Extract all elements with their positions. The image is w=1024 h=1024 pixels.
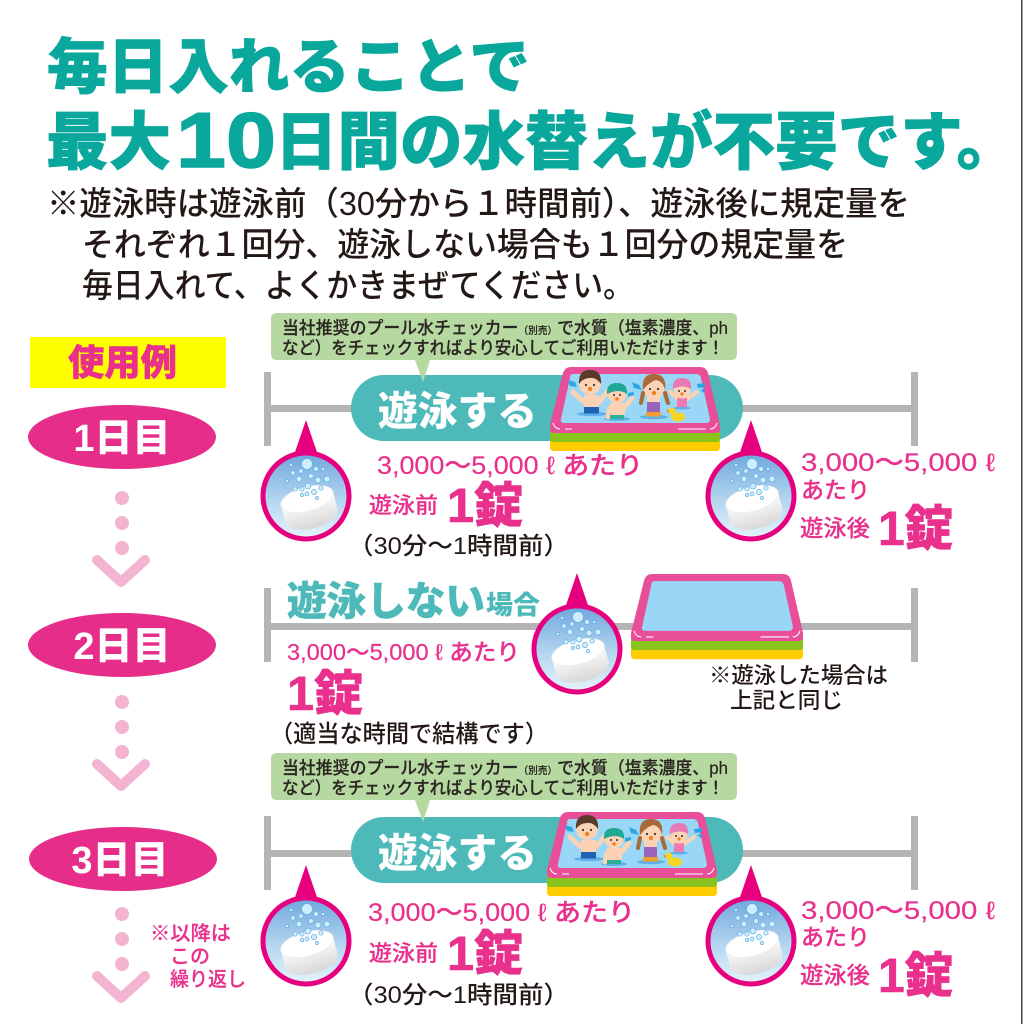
progress arrow 1 [97, 491, 145, 582]
day 3 dose after swim: 1錠 [878, 950, 953, 1003]
usage note: 毎日入れて、よくかきまぜてください。 [82, 267, 634, 304]
day 1 callout: など）をチェックすればより安心してご利用いただけます！ [282, 338, 724, 358]
day 1 callout [271, 313, 737, 382]
day 1 callout: 当社推奨のプール水チェッカー（別売）で水質（塩素濃度、ph [282, 318, 728, 338]
progress arrow 2 [97, 695, 145, 786]
title [46, 34, 1019, 184]
day 3 pool with children [547, 812, 717, 896]
day 2 dose [270, 639, 548, 748]
day 1 dose after swim [800, 449, 996, 556]
right edge rule [1021, 0, 1022, 1024]
day 2 dose: （適当な時間で結構です） [270, 721, 548, 748]
title: 毎日入れることで [47, 34, 530, 101]
day 1 dose before swim: 3,000～5,000 ℓ あたり [377, 452, 643, 480]
day 2 badge: 2日目 [73, 626, 171, 668]
day 3 dose after swim: 3,000～5,000 ℓ [801, 897, 996, 925]
day 2 empty pool [631, 574, 803, 659]
day 2 badge [28, 613, 216, 677]
usage note: ※遊泳時は遊泳前（30分から１時間前）、遊泳後に規定量を [47, 185, 910, 222]
day 3 timeline [264, 816, 918, 890]
day 3 badge: 3日目 [71, 840, 169, 882]
day 1 tablet after swim [708, 420, 794, 539]
day 2 heading: 遊泳しない [287, 580, 485, 624]
repeat note: 繰り返し [170, 968, 246, 991]
day 1 dose before swim: 遊泳前 [369, 493, 438, 518]
day 1 badge: 1日目 [73, 418, 171, 460]
title: 最大 [46, 108, 171, 178]
day 1 dose after swim: 3,000～5,000 ℓ [801, 449, 996, 477]
day 2 dose: 1錠 [287, 668, 363, 721]
day 3 tablet after swim [708, 865, 794, 984]
day 1 swim pill: 遊泳する [378, 390, 537, 434]
day 3 dose after swim: あたり [801, 924, 870, 950]
repeat note: ※以降は [150, 922, 231, 945]
repeat note [150, 922, 246, 991]
usage example label [30, 337, 226, 388]
day 3 dose before swim: 3,000～5,000 ℓ あたり [368, 899, 635, 927]
day 3 dose before swim: 遊泳前 [369, 941, 438, 966]
day 3 dose before swim: （30分～1時間前） [348, 982, 569, 1009]
day 3 callout [271, 753, 737, 822]
progress arrow 3 [97, 907, 145, 998]
day 1 dose before swim: （30分～1時間前） [348, 533, 569, 560]
day 1 dose before swim: 1錠 [447, 480, 523, 533]
title: 日間の水替えが不要です。 [275, 108, 1019, 178]
repeat note: この [170, 946, 210, 968]
day 2 note: ※遊泳した場合は [709, 663, 888, 688]
day 2 note: 上記と同じ [730, 688, 843, 713]
title: 10 [176, 96, 276, 184]
day 1 tablet before swim [263, 420, 349, 539]
day 3 swim pill: 遊泳する [378, 832, 537, 876]
day 1 badge [28, 405, 216, 469]
day 3 callout: など）をチェックすればより安心してご利用いただけます！ [282, 778, 724, 798]
day 3 tablet before swim [263, 865, 349, 984]
day 2 tablet [534, 573, 620, 692]
day 3 callout: 当社推奨のプール水チェッカー（別売）で水質（塩素濃度、ph [282, 758, 728, 778]
day 2 dose: 3,000～5,000 ℓ あたり [287, 639, 520, 665]
day 1 dose before swim [348, 452, 643, 560]
day 3 dose after swim: 遊泳後 [800, 962, 870, 988]
usage example label: 使用例 [68, 342, 177, 383]
day 1 dose after swim: あたり [801, 477, 870, 503]
day 1 dose after swim: 遊泳後 [800, 515, 870, 541]
usage note [47, 185, 910, 304]
day 1 timeline [264, 372, 918, 446]
day 3 dose before swim: 1錠 [447, 928, 523, 981]
day 1 pool with children [550, 367, 720, 451]
day 2 timeline [264, 588, 918, 662]
day 3 dose after swim [800, 897, 996, 1003]
day 3 swim pill [351, 817, 743, 883]
day 3 dose before swim [348, 899, 635, 1009]
day 1 swim pill [351, 375, 743, 441]
day 2 heading: 場合 [486, 590, 540, 620]
day 1 dose after swim: 1錠 [878, 503, 953, 556]
day 3 badge [29, 827, 217, 891]
day 2 note [709, 663, 888, 713]
usage note: それぞれ１回分、遊泳しない場合も１回分の規定量を [82, 226, 848, 263]
